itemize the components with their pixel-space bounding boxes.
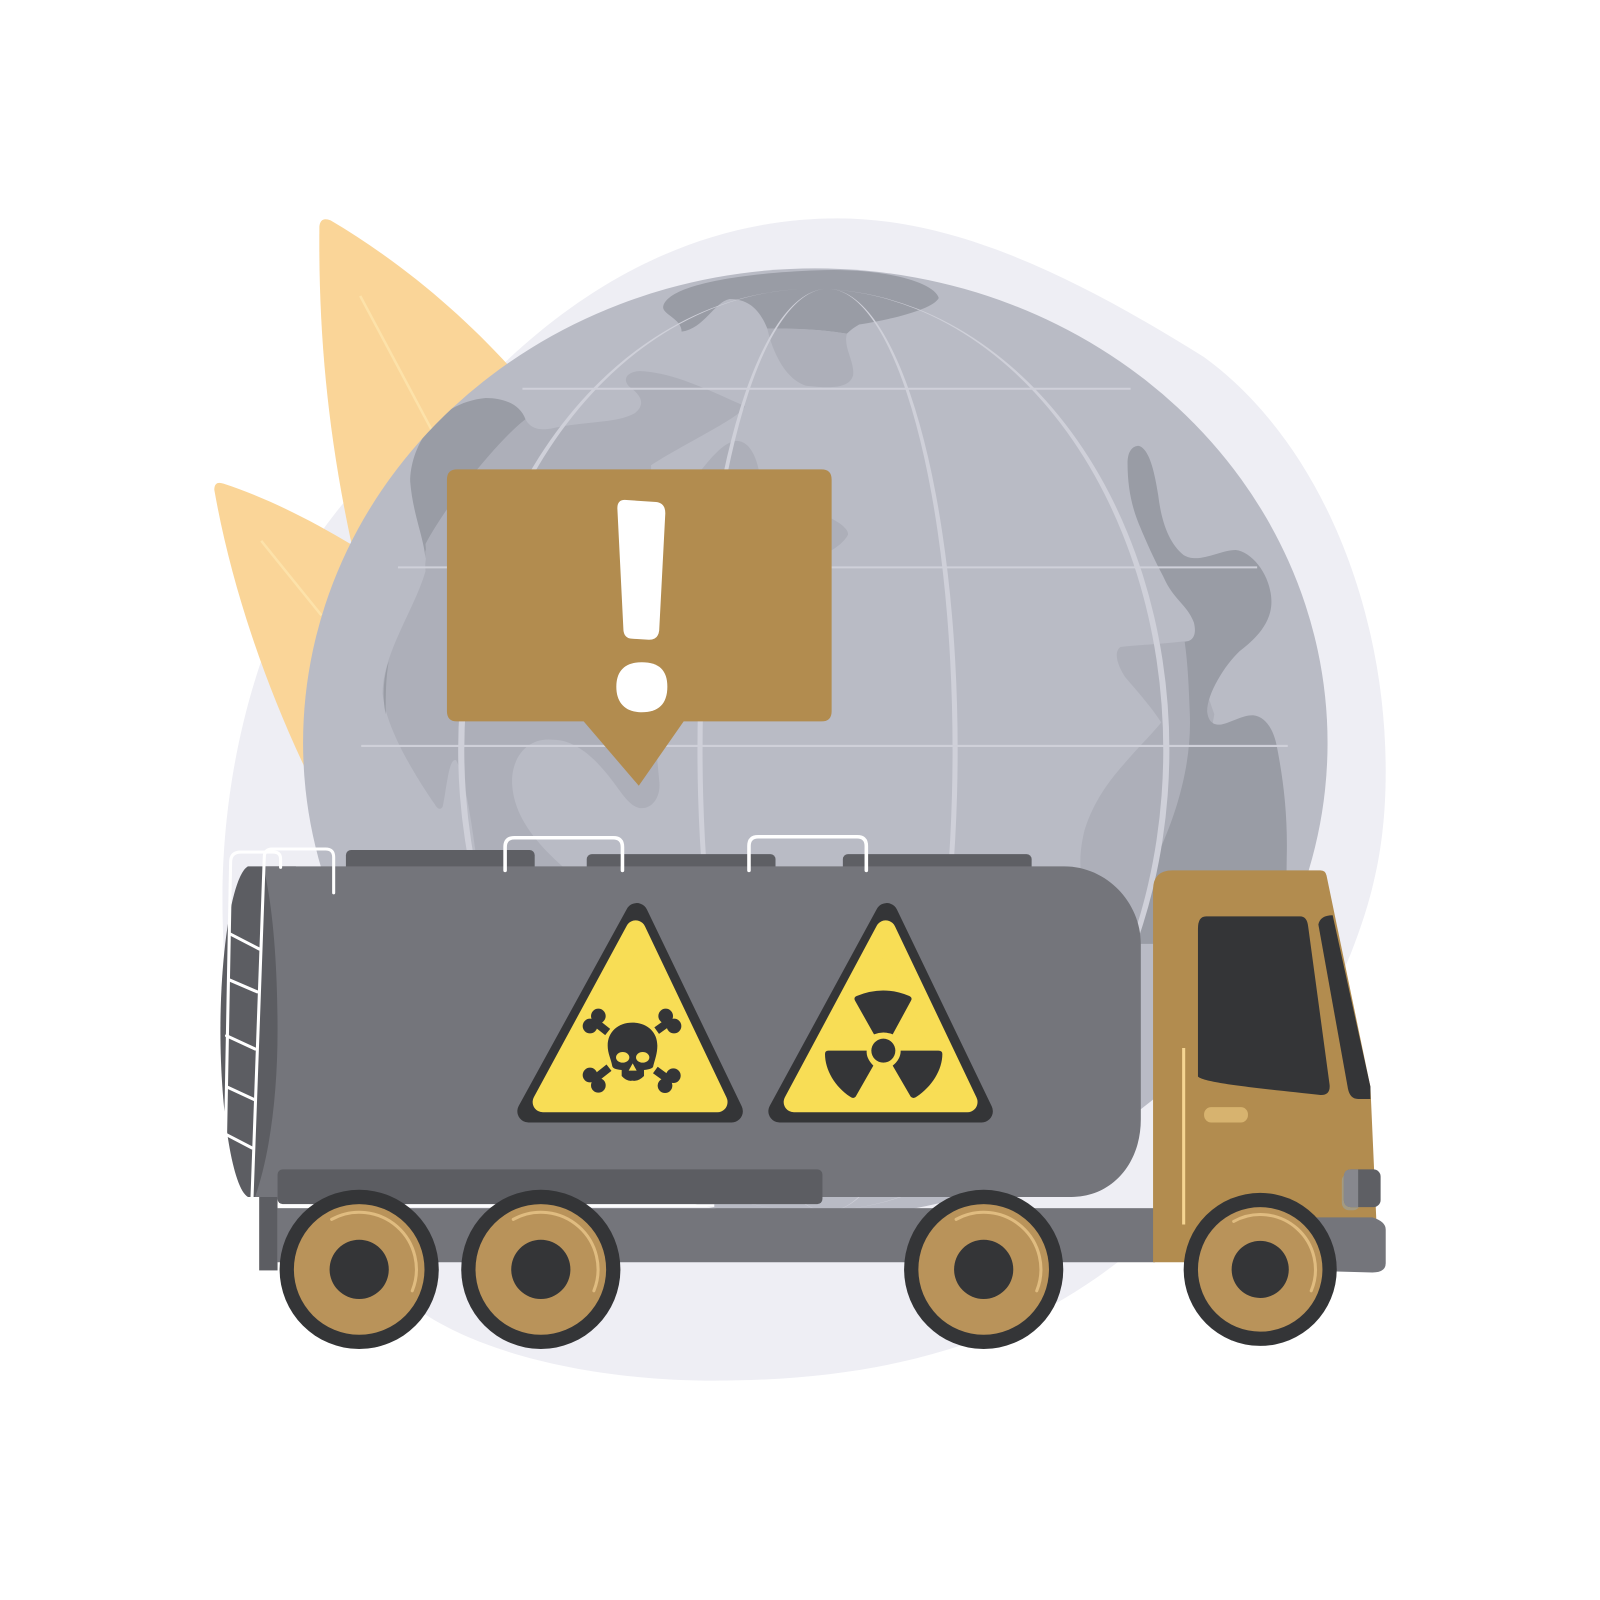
windscreen <box>1318 915 1370 1099</box>
sign border <box>529 914 732 1111</box>
rear post <box>259 1189 278 1270</box>
sign: toxic <box>529 914 732 1111</box>
sign border <box>780 914 982 1111</box>
land: sliver <box>384 661 389 714</box>
leaf: small <box>214 483 352 770</box>
door line <box>1182 1048 1185 1224</box>
skirt <box>278 1169 822 1204</box>
headlight <box>1342 1169 1381 1210</box>
tanker truck <box>220 837 1386 1349</box>
land: polar medium <box>767 329 853 387</box>
land: east medium <box>1080 641 1214 944</box>
wheel: front <box>1184 1193 1337 1346</box>
hatch 1 <box>346 850 535 874</box>
graticule <box>361 289 1288 1211</box>
illustration: hazardous cargo truck in front of globe <box>214 218 1386 1380</box>
sign face <box>794 931 967 1102</box>
land: blob right of callout <box>832 519 848 550</box>
icon: exclamation bar <box>617 500 665 640</box>
cab body <box>1153 870 1377 1262</box>
handle: centre left <box>505 838 622 870</box>
globe disc <box>303 268 1328 1217</box>
icon: exclamation dot <box>616 662 667 712</box>
icon: skull and bones <box>583 1009 681 1093</box>
globe <box>303 268 1328 1217</box>
handle: centre right <box>749 837 866 870</box>
hatch 2 <box>587 854 776 874</box>
meridian: inner <box>697 289 958 1211</box>
cab <box>1153 870 1386 1272</box>
tank body <box>255 866 1141 1197</box>
continents <box>383 270 1287 944</box>
hatch 3 <box>843 854 1032 874</box>
land: west dark <box>410 398 526 573</box>
leaf vein: small <box>261 541 321 615</box>
leaf: large <box>319 219 510 546</box>
chassis <box>278 1208 1155 1262</box>
parallel 1 <box>522 388 1131 390</box>
meridian: outer <box>458 289 1169 1211</box>
skirt underline <box>278 1204 714 1207</box>
parallel 3 <box>361 745 1288 747</box>
land: east dark <box>1128 446 1287 944</box>
parallel 2 <box>398 566 1257 568</box>
icon: radiation trefoil <box>825 991 942 1098</box>
side window <box>1198 916 1330 1095</box>
alert callout <box>447 469 832 786</box>
door handle <box>1204 1107 1248 1122</box>
leaf vein: large <box>360 296 434 434</box>
bumper <box>1296 1217 1386 1272</box>
background blob <box>222 218 1386 1381</box>
wheel: rear 2 <box>461 1190 620 1349</box>
callout bubble <box>447 469 832 786</box>
land: west medium <box>383 371 745 883</box>
ladder <box>226 849 334 1197</box>
leaves <box>214 219 510 770</box>
wheel: rear 1 <box>280 1190 439 1349</box>
sign: radiation <box>780 914 982 1111</box>
tank end cap <box>220 866 296 1197</box>
sign face <box>543 931 717 1102</box>
land: central blob <box>702 441 758 470</box>
wheel: middle <box>904 1190 1063 1349</box>
land: polar dark <box>663 270 939 334</box>
